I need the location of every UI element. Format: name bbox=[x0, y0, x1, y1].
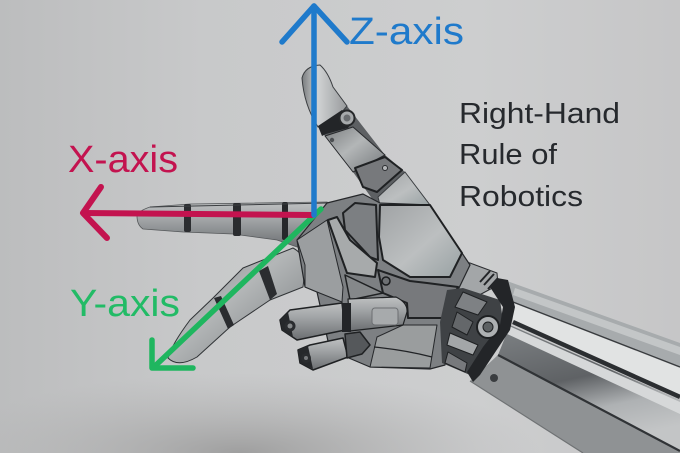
plate: lower left bbox=[345, 275, 383, 300]
curled fingers bbox=[280, 297, 407, 370]
text block: title bbox=[459, 98, 620, 213]
label: X-axis: X-axis bbox=[68, 139, 178, 181]
plate: lower centre bbox=[378, 270, 458, 318]
text block: title: Right-Hand bbox=[459, 98, 620, 130]
arrow: Y-axis (green) bbox=[152, 209, 321, 368]
upper curled finger bbox=[348, 297, 407, 331]
palm with armour plates bbox=[297, 194, 470, 369]
label: Z-axis: Z-axis bbox=[349, 11, 464, 53]
arrow: X-axis (crimson) bbox=[83, 187, 312, 238]
plate: upper centre bbox=[343, 203, 378, 260]
thumb base bbox=[378, 172, 430, 205]
lower curled finger bbox=[298, 338, 348, 370]
wrist neck bbox=[455, 260, 498, 300]
thumb tip bbox=[302, 65, 347, 127]
plate: main back of hand bbox=[379, 205, 462, 277]
robotic hand illustration bbox=[137, 65, 680, 453]
forearm bbox=[470, 281, 680, 453]
thumb bbox=[302, 65, 432, 207]
thumb knuckle bbox=[355, 157, 402, 192]
palm side strip bbox=[297, 220, 343, 302]
plate: left bbox=[328, 217, 377, 277]
label: Y-axis: Y-axis bbox=[70, 283, 180, 325]
text block: title: Rule of bbox=[459, 139, 558, 171]
thumb joint band bbox=[318, 110, 355, 136]
middle finger bbox=[168, 248, 305, 363]
index finger bbox=[137, 202, 345, 248]
wrist cuff bbox=[440, 278, 515, 382]
plate: under palm bbox=[370, 325, 437, 368]
text block: title: Robotics bbox=[459, 181, 583, 213]
thumb second segment bbox=[325, 127, 385, 172]
thumb silhouette bbox=[302, 65, 432, 207]
arrow: Z-axis (blue) bbox=[282, 6, 347, 215]
